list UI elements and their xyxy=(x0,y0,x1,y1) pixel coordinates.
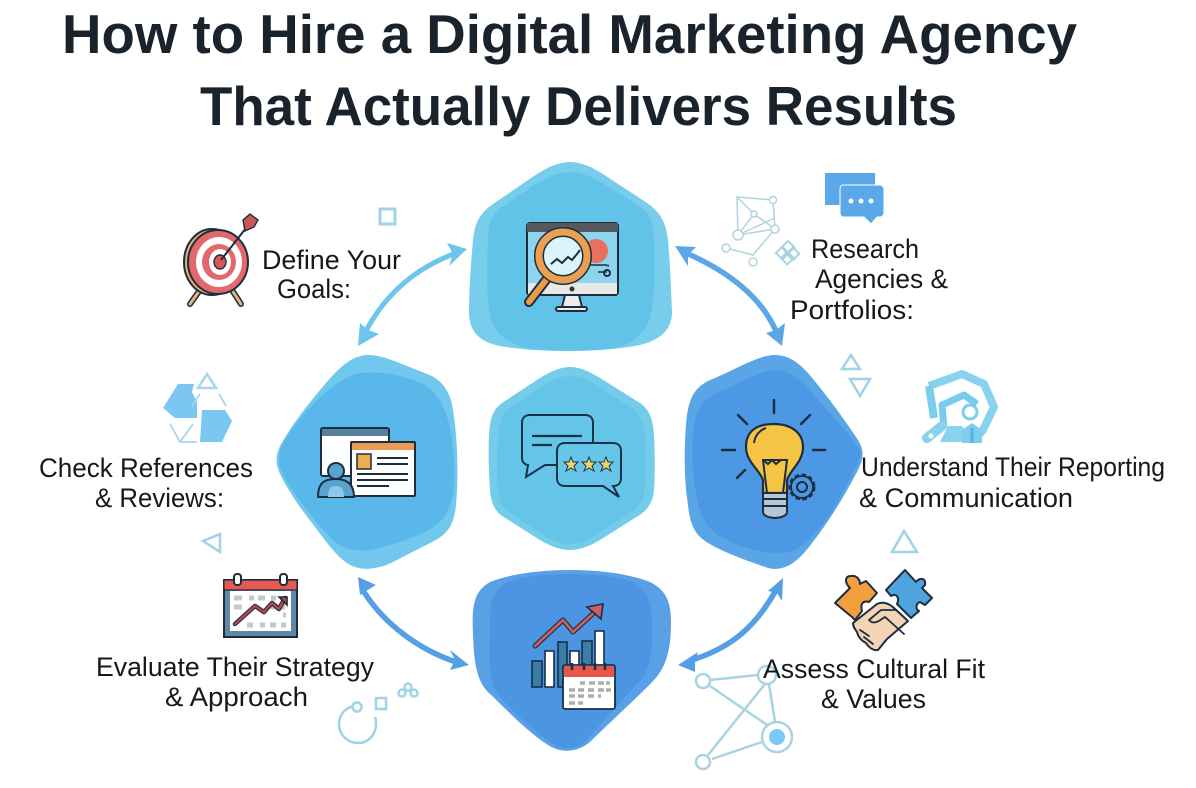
panel: right blob reporting xyxy=(685,355,862,569)
icon: triangle lower right xyxy=(892,531,917,552)
text: research agencies and portfolios: Portfolios: xyxy=(790,295,914,325)
text: understand reporting: Understand Their Reporting xyxy=(861,452,1165,482)
panel: top blob research xyxy=(469,162,672,351)
icon: target with arrow xyxy=(184,214,258,304)
icon: network bottom right xyxy=(696,666,792,769)
title xyxy=(62,3,1077,137)
arrow: top right xyxy=(675,246,785,346)
text: evaluate strategy xyxy=(96,652,375,712)
text: research agencies and portfolios: Agencies & xyxy=(815,264,948,294)
title: How to Hire a Digital Marketing Agency xyxy=(62,3,1077,65)
icon: small triangle left xyxy=(203,534,220,552)
icon: web windows and person xyxy=(318,428,415,497)
text: define your goals: Goals: xyxy=(277,274,351,304)
icon: recycle hexagons xyxy=(163,374,232,442)
icon: monitor with magnifier xyxy=(527,223,618,311)
text: evaluate strategy: & Approach xyxy=(165,682,308,712)
panel: left blob references xyxy=(276,355,457,569)
text: check references xyxy=(39,453,253,513)
icon: chat bubbles with stars xyxy=(522,415,621,497)
text: research agencies and portfolios: Research xyxy=(811,234,919,264)
icon: puzzle and handshake xyxy=(835,570,932,650)
icon: small square top xyxy=(380,209,395,224)
icon: blue chat bubbles xyxy=(825,173,884,224)
icon: clover xyxy=(776,241,799,264)
text: research agencies and portfolios xyxy=(790,234,948,325)
icon: triangle up right xyxy=(842,355,860,369)
icon: triangle down right xyxy=(850,379,870,396)
arrow: bottom left xyxy=(358,577,469,670)
panel: bottom blob strategy xyxy=(473,570,671,751)
icon: ring and small shapes xyxy=(339,684,418,743)
icon: consultant hexagon xyxy=(927,374,994,443)
text: define your goals xyxy=(262,245,401,304)
arrow: bottom right xyxy=(678,578,783,672)
icon: bar chart with calendar xyxy=(532,604,615,709)
panel: center blob reviews xyxy=(489,367,655,550)
text: understand reporting xyxy=(859,452,1165,513)
text: check references: & Reviews: xyxy=(95,483,224,513)
text: assess cultural fit xyxy=(763,654,986,714)
icon: light bulb with gear xyxy=(722,400,825,518)
text: understand reporting: & Communication xyxy=(859,483,1073,513)
text: assess cultural fit: & Values xyxy=(821,684,926,714)
text: assess cultural fit: Assess Cultural Fit xyxy=(763,654,986,684)
arrow: top left xyxy=(358,243,467,346)
text: evaluate strategy: Evaluate Their Strategy xyxy=(96,652,375,682)
text: check references: Check References xyxy=(39,453,253,483)
icon: calendar with trend xyxy=(224,574,297,637)
icon: network top right xyxy=(722,196,779,266)
text: define your goals: Define Your xyxy=(262,245,401,275)
title: That Actually Delivers Results xyxy=(200,75,957,137)
